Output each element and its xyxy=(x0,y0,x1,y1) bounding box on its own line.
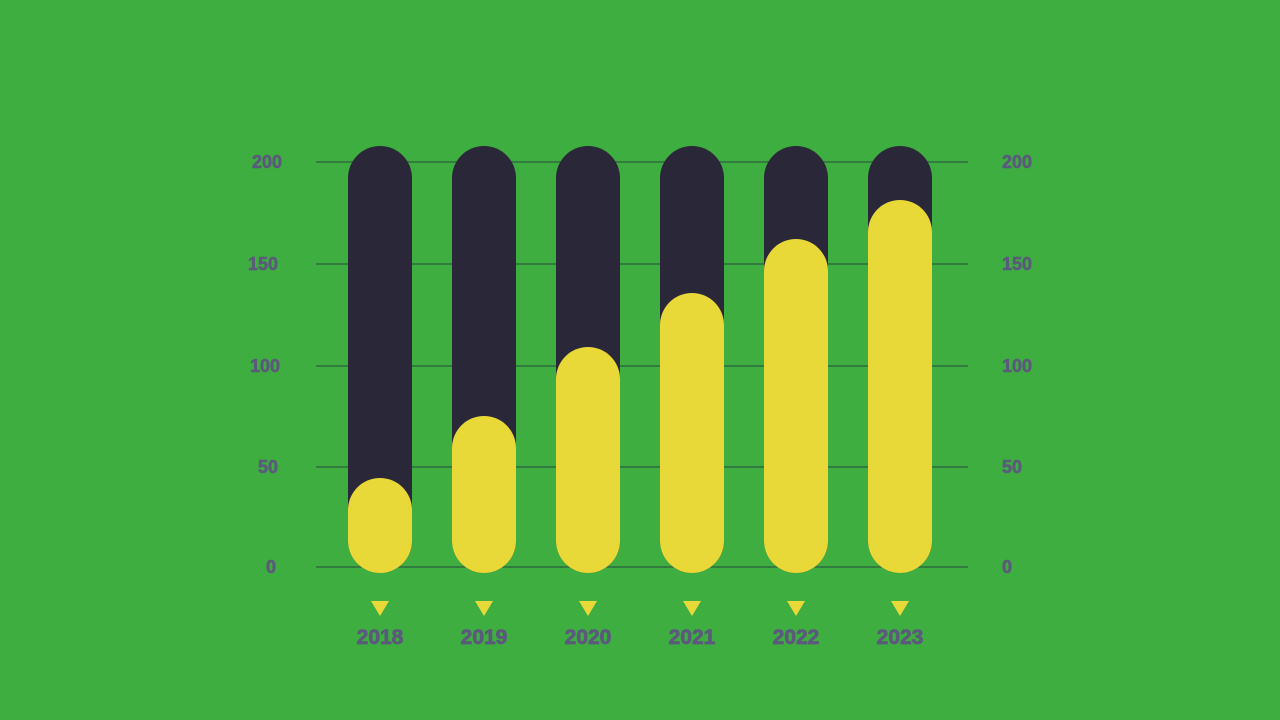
right axis labels xyxy=(1002,152,1032,577)
left axis labels: 200 xyxy=(252,152,282,172)
year labels: 2021 xyxy=(669,626,716,649)
left axis labels: 50 xyxy=(258,457,278,477)
right axis labels: 200 xyxy=(1002,152,1032,172)
right axis labels: 150 xyxy=(1002,254,1032,274)
left axis labels: 100 xyxy=(250,356,280,376)
bars xyxy=(348,146,932,573)
right axis labels: 0 xyxy=(1002,557,1012,577)
left axis labels: 150 xyxy=(248,254,278,274)
right axis labels: 50 xyxy=(1002,457,1022,477)
left axis labels: 0 xyxy=(266,557,276,577)
right axis labels: 100 xyxy=(1002,356,1032,376)
year labels: 2022 xyxy=(773,626,819,649)
left axis labels xyxy=(248,152,282,577)
year labels: 2023 xyxy=(877,626,923,649)
markers xyxy=(371,601,909,616)
year labels: 2018 xyxy=(357,626,404,649)
year labels: 2019 xyxy=(461,626,507,649)
year labels: 2020 xyxy=(565,626,611,649)
year labels xyxy=(357,626,923,649)
